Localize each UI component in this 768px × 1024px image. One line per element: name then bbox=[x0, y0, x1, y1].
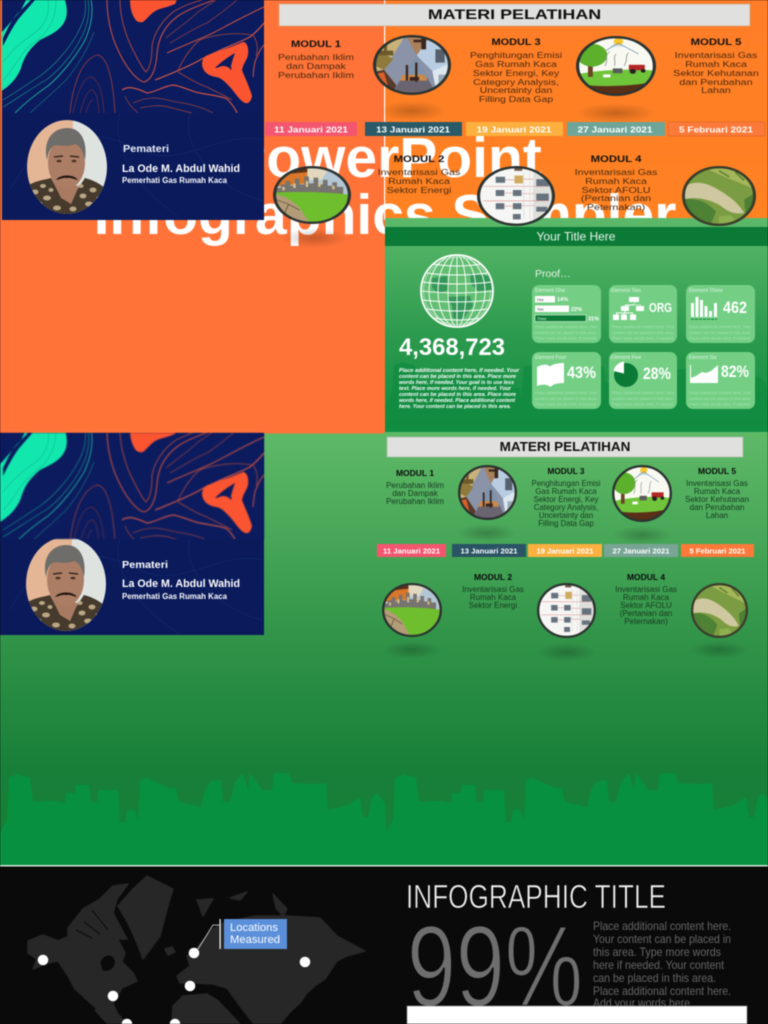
modul 5 text: Lahan bbox=[701, 86, 731, 96]
modul 5 text: Inventarisasi Gas bbox=[675, 51, 758, 61]
date bars: 11 Januari 2021 bbox=[383, 546, 440, 556]
photo: aerial land bbox=[682, 166, 756, 226]
description text: this area. Type more words bbox=[593, 945, 721, 959]
modul 2 text bbox=[462, 572, 524, 610]
presenter text: Pemateri bbox=[122, 559, 168, 571]
sampler headline: PowerPoint bbox=[228, 126, 542, 190]
card: element two: Element Two bbox=[611, 288, 641, 294]
description text bbox=[593, 919, 731, 1010]
date bars bbox=[377, 544, 754, 557]
italic description: content can be placed in this area. Place more bbox=[399, 392, 516, 398]
description text: Add your words here bbox=[593, 996, 690, 1010]
date bars: 19 Januari 2021 bbox=[536, 546, 594, 556]
modul 5 text bbox=[685, 466, 749, 520]
modul 4 text: Sektor AFOLU bbox=[582, 186, 651, 196]
description text: can be placed in this area. bbox=[593, 971, 716, 985]
topographic art bbox=[0, 432, 265, 540]
photo: agriculture emissions diagram bbox=[576, 36, 656, 96]
title bar: Your Title Here bbox=[537, 230, 616, 244]
banner: materi pelatihan bbox=[387, 437, 743, 457]
modul 3 text bbox=[532, 466, 601, 528]
date bars bbox=[265, 122, 765, 136]
card: element five: 28% bbox=[643, 364, 671, 383]
modul 1 text bbox=[386, 468, 444, 506]
modul 2 text bbox=[378, 155, 461, 196]
card: element four: Place more words here, if needed. bbox=[535, 402, 597, 406]
modul 4 text: MODUL 4 bbox=[591, 155, 642, 165]
presenter text: La Ode M. Abdul Wahid bbox=[122, 578, 240, 590]
card: element three: Element Three bbox=[689, 288, 723, 294]
presenter text bbox=[122, 559, 240, 601]
modul 5 text: dan Perubahan bbox=[679, 78, 753, 88]
proof heading: Proof… bbox=[535, 268, 571, 280]
map locations bbox=[38, 948, 310, 1024]
photo: aerial land bbox=[691, 583, 748, 638]
card: element three: Place more words here, if needed. bbox=[689, 336, 751, 340]
big number: 4,368,723 bbox=[399, 334, 505, 361]
modul 1 text: Perubahan Iklim bbox=[386, 497, 444, 506]
world map bbox=[28, 876, 365, 1024]
modul 4 text: MODUL 4 bbox=[627, 572, 665, 582]
card: element three: content can be placed in this area. bbox=[689, 331, 751, 335]
presenter text: Pemerhati Gas Rumah Kaca bbox=[122, 176, 228, 185]
panel: green stats slide bbox=[385, 218, 768, 432]
card: element four bbox=[532, 352, 601, 409]
modul 4 text: Peternakan) bbox=[624, 617, 668, 626]
orange background right bbox=[385, 0, 768, 220]
modul 2 text: Rumah Kaca bbox=[388, 177, 451, 187]
circle shadows bbox=[280, 101, 656, 248]
card: element four: content can be placed in this area. bbox=[535, 397, 597, 401]
orange background left bbox=[0, 0, 385, 432]
photo: climate change bbox=[382, 583, 442, 637]
presenter text: Pemateri bbox=[123, 143, 169, 155]
italic description: words here, if needed. Place additional content bbox=[399, 398, 515, 404]
description text: Your content can be placed in bbox=[593, 932, 731, 946]
presenter panel lower bbox=[0, 430, 264, 635]
modul 1 text: Perubahan Iklim bbox=[386, 481, 444, 490]
banner: materi pelatihan: MATERI PELATIHAN bbox=[500, 439, 630, 454]
modul 4 text: Inventarisasi Gas bbox=[575, 168, 658, 178]
card: element one: 14% bbox=[557, 297, 568, 303]
card: element three: Place additional content here. Your bbox=[689, 325, 752, 329]
card: element five bbox=[609, 352, 677, 409]
section 1: orange infographic slide bbox=[0, 0, 768, 432]
modul 5 text: Sektor Kehutanan bbox=[673, 69, 759, 79]
card: element five: Place more words here, if needed. bbox=[612, 402, 674, 406]
modul 1 text bbox=[278, 40, 354, 81]
card: element four: Place additional content here. Your bbox=[535, 391, 598, 395]
card: element one: Two bbox=[537, 308, 544, 312]
modul 4 text bbox=[615, 572, 677, 626]
date bars: 13 Januari 2021 bbox=[460, 546, 518, 556]
description text: Place additional content here. bbox=[593, 984, 731, 998]
date bars: 5 Februari 2021 bbox=[679, 126, 754, 134]
card: element six bbox=[686, 352, 755, 409]
modul 4 text: Rumah Kaca bbox=[623, 593, 670, 602]
faint skyline bbox=[385, 362, 768, 428]
section 2: green training slide bbox=[0, 430, 768, 866]
panel background bbox=[385, 218, 768, 432]
modul 5 text: MODUL 5 bbox=[698, 466, 736, 476]
date bars: 11 Januari 2021 bbox=[274, 126, 349, 134]
left edge strip bbox=[0, 0, 2, 220]
card: element four: Element Four bbox=[535, 355, 566, 361]
modul 5 text: dan Perubahan bbox=[690, 503, 744, 512]
card: element one: content can be placed in this area. bbox=[535, 331, 597, 335]
italic description: Place additional content here, if needed. Your bbox=[399, 368, 520, 374]
modul 1 text: dan Dampak bbox=[286, 62, 346, 72]
card: element six: Place more words here, if needed. bbox=[689, 402, 751, 406]
vertical slide seam bbox=[384, 0, 385, 220]
icon: open book bbox=[537, 363, 564, 387]
modul 4 text: Sektor AFOLU bbox=[620, 601, 672, 610]
sampler headline bbox=[94, 126, 676, 247]
modul 5 text: Sektor Kehutanan bbox=[685, 495, 749, 504]
modul 4 text: Peternakan) bbox=[587, 203, 645, 213]
white box bbox=[407, 1006, 747, 1024]
modul 2 text: Rumah Kaca bbox=[470, 593, 517, 602]
modul 3 text: Penghitungan Emisi bbox=[532, 479, 601, 488]
italic description: here. Your content can be placed in this area. bbox=[399, 404, 511, 410]
faint contour lines bbox=[10, 113, 262, 218]
card: element six: content can be placed in this area. bbox=[689, 397, 751, 401]
description text: here if needed. Your content bbox=[593, 958, 725, 972]
portrait photo bbox=[26, 537, 106, 631]
card: element six: Element Six bbox=[689, 355, 717, 361]
card: element two: content can be placed in this area. bbox=[612, 331, 674, 335]
green background bbox=[0, 432, 768, 865]
modul 2 text: Sektor Energi bbox=[469, 601, 517, 610]
photo circles top bbox=[273, 35, 756, 226]
modul 3 text: MODUL 3 bbox=[548, 466, 585, 476]
card: element one: One bbox=[537, 298, 544, 302]
icon: bar chart bbox=[691, 297, 717, 317]
modul 5 text: Inventarisasi Gas bbox=[686, 479, 748, 488]
modul 3 text: Category Analysis, bbox=[473, 78, 559, 88]
photo: energy network chart bbox=[537, 583, 596, 638]
top banner: materi pelatihan bbox=[279, 4, 750, 26]
modul 4 text: Inventarisasi Gas bbox=[615, 585, 677, 594]
card: element one: Element One bbox=[535, 288, 565, 294]
modul 1 text: Perubahan Iklim bbox=[278, 71, 354, 81]
modul 2 text: Inventarisasi Gas bbox=[378, 168, 461, 178]
modul 3 text: Penghitungan Emisi bbox=[470, 51, 562, 61]
photo: agriculture emissions diagram bbox=[612, 465, 672, 522]
card: element six: Place additional content here. Your bbox=[689, 391, 752, 395]
modul 3 text: Gas Rumah Kaca bbox=[535, 487, 597, 496]
city skyline bbox=[0, 773, 768, 865]
modul 3 text bbox=[470, 38, 562, 105]
icon: org chart bbox=[613, 297, 644, 320]
card: element two bbox=[609, 285, 677, 343]
icon: area chart bbox=[690, 365, 718, 383]
date bars: 19 Januari 2021 bbox=[476, 126, 552, 134]
modul 2 text: MODUL 2 bbox=[474, 572, 512, 582]
photo: climate change bbox=[273, 166, 351, 224]
card: element six: 82% bbox=[721, 362, 749, 381]
icon: wire globe bbox=[421, 255, 493, 327]
topographic art bbox=[0, 0, 264, 113]
slide divider line bbox=[0, 865, 768, 866]
modul 3 text: Sektor Energi, Key bbox=[534, 495, 598, 504]
modul 2 text: MODUL 2 bbox=[394, 155, 445, 165]
photo: energy network chart bbox=[477, 166, 555, 226]
icon: pie chart bbox=[614, 362, 638, 387]
presenter text: Pemerhati Gas Rumah Kaca bbox=[122, 592, 228, 601]
modul 4 text: Rumah Kaca bbox=[585, 177, 648, 187]
presenter panel top bbox=[0, 0, 264, 220]
section 3: black infographic slide bbox=[0, 866, 768, 1024]
card: element one: 31% bbox=[588, 316, 599, 322]
date bars: 27 Januari 2021 bbox=[612, 546, 670, 556]
callout: locations measured bbox=[198, 919, 287, 949]
title bar bbox=[385, 227, 768, 246]
card: element one: Three bbox=[537, 317, 546, 321]
modul 4 text bbox=[575, 155, 658, 213]
presenter text bbox=[122, 143, 240, 185]
date bars: 27 Januari 2021 bbox=[578, 126, 653, 134]
modul 3 text: Uncertainty dan bbox=[480, 86, 552, 96]
card: element one: Place more words here, if needed. bbox=[535, 336, 597, 340]
modul 5 text bbox=[673, 38, 759, 96]
black background bbox=[0, 866, 768, 1024]
modul 3 text: Filling Data Gap bbox=[479, 95, 553, 105]
card: element three bbox=[686, 285, 755, 343]
card: element one bbox=[532, 285, 601, 343]
modul 2 text: Sektor Energi bbox=[387, 186, 451, 196]
modul 1 text: Perubahan Iklim bbox=[278, 53, 354, 63]
italic description bbox=[399, 368, 520, 410]
card: element five: Element Five bbox=[611, 355, 641, 361]
circle shadows bbox=[382, 524, 749, 661]
navy panel bbox=[0, 433, 264, 635]
photo: industry bbox=[458, 465, 517, 520]
navy panel bbox=[2, 0, 264, 220]
card: element one: 22% bbox=[571, 307, 582, 313]
sampler headline: Infographics Sampler bbox=[94, 183, 676, 247]
modul 4 text: (Pertanian dan bbox=[581, 194, 651, 204]
modul 2 text: Inventarisasi Gas bbox=[462, 585, 524, 594]
orange strip above bbox=[0, 432, 384, 434]
modul 5 text: Lahan bbox=[706, 511, 728, 520]
modul 3 text: MODUL 3 bbox=[491, 38, 541, 48]
card: element five: Place additional content here. Your bbox=[612, 391, 675, 395]
callout: locations measured: Locations bbox=[230, 922, 279, 934]
modul 3 text: Sektor Energi, Key bbox=[473, 69, 559, 79]
modul 5 text: MODUL 5 bbox=[691, 38, 742, 48]
date bars: 13 Januari 2021 bbox=[376, 126, 451, 134]
infographic title: INFOGRAPHIC TITLE bbox=[406, 878, 666, 915]
description text: Place additional content here. bbox=[593, 919, 731, 933]
modul 4 text: (Pertanian dan bbox=[620, 609, 672, 618]
modul 5 text: Rumah Kaca bbox=[685, 60, 748, 70]
modul 3 text: Filling Data Gap bbox=[538, 519, 594, 528]
portrait photo bbox=[27, 120, 107, 214]
modul 3 text: Uncertainty dan bbox=[539, 511, 593, 520]
modul 3 text: Gas Rumah Kaca bbox=[475, 60, 558, 70]
italic description: text. Place more words here, if needed. Your bbox=[399, 386, 512, 392]
callout: locations measured: Measured bbox=[230, 934, 280, 946]
modul 1 text: MODUL 1 bbox=[396, 468, 434, 478]
italic description: content can be placed in this area. Place more bbox=[399, 374, 516, 380]
card: element five: content can be placed in this area. bbox=[612, 397, 674, 401]
card: element two: Place additional content here. Your bbox=[612, 325, 675, 329]
presenter text: La Ode M. Abdul Wahid bbox=[122, 163, 240, 175]
card: element two: Place more words here, if needed. bbox=[612, 336, 674, 340]
photo circles lower bbox=[382, 465, 748, 638]
modul 3 text: Category Analysis, bbox=[534, 503, 598, 512]
date bars: 5 Februari 2021 bbox=[690, 546, 746, 556]
card: element three: 462 bbox=[723, 298, 747, 317]
italic description: words here, if needed. Your goal is to use less bbox=[399, 380, 514, 386]
modul 1 text: MODUL 1 bbox=[291, 40, 341, 50]
faint contour lines bbox=[10, 539, 262, 634]
card: element one: Place additional content here. Your bbox=[535, 325, 598, 329]
modul 5 text: Rumah Kaca bbox=[694, 487, 741, 496]
top banner: materi pelatihan: MATERI PELATIHAN bbox=[428, 7, 601, 22]
arctic channels and hudson bay bbox=[76, 910, 114, 970]
card: element four: 43% bbox=[567, 363, 596, 382]
card: element two: ORG bbox=[649, 300, 672, 315]
photo: industry bbox=[373, 35, 451, 95]
modul 1 text: dan Dampak bbox=[392, 489, 439, 498]
